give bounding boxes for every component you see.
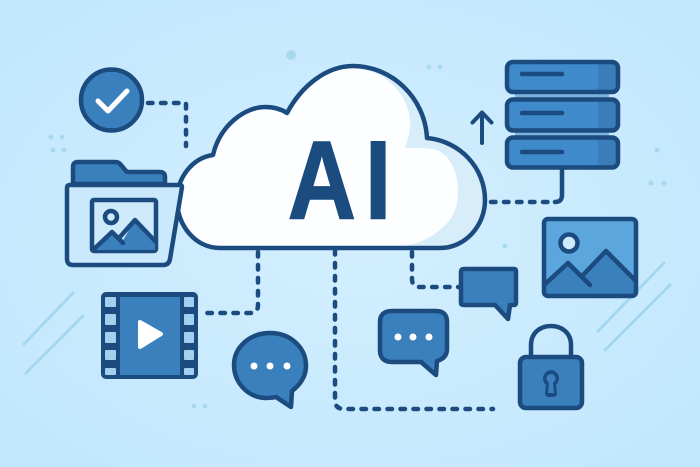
cloud with AI label bbox=[177, 66, 485, 248]
icon: square chat bubble bbox=[461, 269, 516, 319]
icon: video film strip bbox=[101, 292, 198, 379]
dashed connectors bbox=[148, 103, 555, 409]
icon: folder with image bbox=[67, 162, 182, 265]
icon: rounded chat bubble with dots bbox=[380, 311, 447, 375]
icon: check badge bbox=[81, 70, 142, 130]
icon: server stack bbox=[507, 62, 618, 202]
icon: round chat bubble bbox=[234, 333, 306, 407]
icon: padlock bbox=[520, 326, 582, 408]
title: AI: AI bbox=[288, 118, 391, 242]
arrow: upload bbox=[472, 112, 492, 143]
server row 3 bbox=[507, 138, 618, 168]
decorative dots and diagonal lines bbox=[24, 50, 670, 408]
server row 2 bbox=[507, 100, 618, 130]
icon: picture frame bbox=[544, 219, 636, 296]
server row 1 bbox=[507, 62, 618, 92]
